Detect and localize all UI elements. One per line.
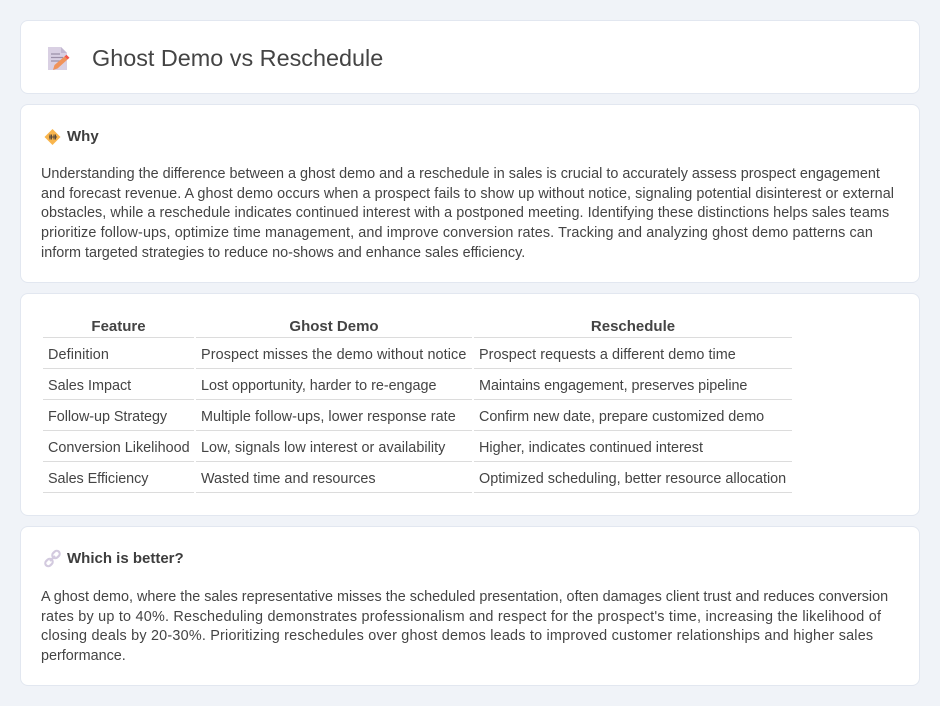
row: sales impact [43,378,792,400]
panel: which is better [20,526,920,686]
icon: document with pencil [48,47,70,70]
panel: why [20,104,920,283]
row: follow-up strategy: Follow-up Strategy [48,409,167,425]
row: follow-up strategy [43,409,792,431]
row: sales impact: Sales Impact [48,378,131,394]
why text block: Understanding the difference between a ghost demo and a reschedule in sales is crucial to accurately assess prospect engagement [41,166,880,182]
row: sales impact: Lost opportunity, harder to re-engage [201,378,436,394]
which is better text block [41,589,888,664]
row: sales efficiency: Optimized scheduling, better resource allocation [479,471,786,487]
row: definition: Definition [48,347,109,363]
icon: chain link [44,550,61,568]
which is better text block: rates by up to 40%. Rescheduling demonstrates professionalism and respect for the prospect's time, increasing the likelihood of [41,609,881,625]
row: definition: Prospect misses the demo without notice [201,347,466,363]
why text block: and forecast revenue. A ghost demo occurs when a prospect fails to show up without notice, signaling potential disinterest or external [41,186,894,202]
row: sales efficiency: Wasted time and resources [201,471,376,487]
which is better text block: performance. [41,648,126,664]
row: conversion likelihood: Higher, indicates continued interest [479,440,703,456]
row: sales impact: Maintains engagement, preserves pipeline [479,378,747,394]
table header row: Feature [91,318,146,335]
row: conversion likelihood: Conversion Likelihood [48,440,190,456]
icon: warning diamond [44,129,60,145]
row: follow-up strategy: Multiple follow-ups, lower response rate [201,409,456,425]
title: Ghost Demo vs Reschedule [92,45,383,71]
which is better text block: A ghost demo, where the sales representative misses the scheduled presentation, often damages client trust and reduces conversion [41,589,888,605]
heading: why: Why [67,128,99,145]
row: follow-up strategy: Confirm new date, prepare customized demo [479,409,764,425]
table header row: Ghost Demo [289,318,379,335]
panel: comparison table [20,293,920,516]
table header row: Reschedule [591,318,675,335]
why text block: inform targeted strategies to reduce no-shows and enhance sales efficiency. [41,245,525,261]
row: definition [43,347,792,369]
table header row [43,318,792,338]
row: definition: Prospect requests a different demo time [479,347,736,363]
why text block: obstacles, while a reschedule indicates continued interest with a postponed meeting. Identifying these distinctions helps sales teams [41,205,889,221]
row: sales efficiency [43,471,792,493]
row: conversion likelihood [43,440,792,462]
panel: title header [20,20,920,94]
which is better text block: closing deals by 20-30%. Prioritizing reschedules over ghost demos leads to improved customer relationships and higher sales [41,628,873,644]
row: conversion likelihood: Low, signals low interest or availability [201,440,445,456]
heading: which is better: Which is better? [67,550,184,567]
why text block [41,166,894,261]
why text block: prioritize follow-ups, optimize time management, and improve conversion rates. Tracking and analyzing ghost demo patterns can [41,225,873,241]
row: sales efficiency: Sales Efficiency [48,471,148,487]
